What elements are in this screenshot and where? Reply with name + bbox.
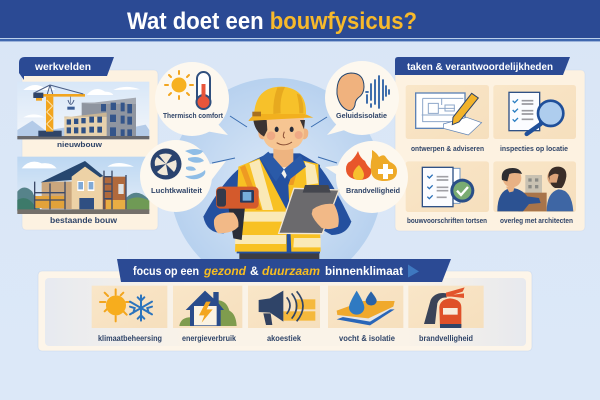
icon: ear — [337, 73, 364, 110]
central halo circle — [170, 78, 382, 290]
label: geluidsisolatie: Geluidsisolatie — [336, 113, 387, 120]
arm right — [310, 165, 351, 235]
title: Wat doet een bouwfysicus? — [127, 8, 417, 35]
focus ribbon: duurzaam — [262, 264, 320, 278]
taken ribbon — [395, 57, 570, 75]
focus ribbon: gezond — [203, 264, 247, 278]
icon: sound wave — [366, 76, 389, 108]
icon: thermometer — [196, 72, 210, 109]
label: bestaande bouw: bestaande bouw — [50, 215, 117, 225]
panel: taken en verantwoordelijkheden — [395, 57, 585, 231]
eyes — [275, 127, 294, 132]
bubble: brandveiligheid — [325, 141, 408, 213]
label: klimaatbeheersing: klimaatbeheersing — [98, 334, 162, 343]
image: nieuwbouw — [17, 82, 149, 139]
label: vocht en isolatie: vocht & isolatie — [339, 334, 396, 343]
taken card — [395, 70, 585, 231]
clipboard — [279, 185, 339, 234]
icon: flame — [346, 151, 371, 180]
cheeks — [267, 131, 303, 140]
focus ribbon — [117, 259, 451, 282]
bubble: geluidsisolatie — [325, 61, 399, 135]
label: inspecties: inspecties op locatie — [500, 144, 568, 153]
label: bouwvoorschriften: bouwvoorschriften tortsen — [407, 216, 487, 225]
cell: ontwerpen — [406, 85, 489, 139]
hair — [253, 120, 305, 137]
cell: bouwvoorschriften — [406, 161, 489, 212]
thermal camera — [216, 187, 259, 240]
face — [263, 117, 304, 150]
bubble: luchtkwaliteit — [140, 140, 226, 212]
label: brandveiligheid: brandvelligheid — [419, 334, 473, 343]
werkvelden card — [22, 70, 158, 230]
smile — [277, 132, 292, 145]
tile: energieverbruik — [173, 286, 242, 328]
vest stripes — [235, 159, 321, 247]
vest orange edges — [240, 161, 300, 210]
hand right — [312, 204, 339, 229]
tile: akoestiek — [248, 286, 320, 328]
label: thermisch comfort: Thermisch comfort — [163, 113, 224, 120]
bubble: thermisch comfort — [155, 62, 229, 136]
icon: flame with plus — [371, 150, 397, 181]
arm left — [203, 167, 247, 233]
focus ribbon: & — [250, 264, 259, 278]
focus ribbon: binnenklimaat — [325, 264, 403, 278]
focus inner area — [45, 278, 526, 346]
ears — [258, 128, 308, 139]
label: nieuwbouw: nieuwbouw — [57, 140, 102, 149]
hard hat — [248, 87, 313, 121]
undershirt — [277, 167, 291, 179]
cell: inspecties — [493, 85, 576, 139]
icon: air waves — [185, 149, 205, 179]
connector lines — [212, 116, 337, 163]
cell: overleg — [493, 161, 576, 212]
panel: focus — [38, 259, 532, 351]
worker figure — [203, 87, 351, 263]
label: brandveiligheid: Brandvelligheid — [346, 188, 400, 195]
label: energieverbruik: energieverbruik — [182, 334, 236, 343]
shirt — [237, 153, 320, 253]
label: overleg: overleg met architecten — [500, 216, 573, 225]
icon: fan — [150, 148, 182, 180]
vest — [235, 158, 321, 252]
header banner — [0, 0, 600, 41]
focus ribbon: focus op een — [133, 264, 199, 278]
focus card — [38, 271, 532, 351]
hand left — [214, 213, 238, 233]
label: ontwerpen en adviseren: ontwerpen & adviseren — [411, 144, 484, 153]
panel: werkvelden — [17, 57, 158, 230]
werkvelden ribbon — [19, 57, 114, 80]
label: akoestiek: akoestiek — [267, 334, 302, 343]
collar — [260, 152, 306, 182]
taken ribbon: taken & verantwoordelijkheden — [407, 61, 553, 73]
image: bestaande bouw — [17, 157, 149, 214]
tile: vocht en isolatie — [328, 286, 403, 328]
label: luchtkwaliteit: Luchtkwaliteit — [151, 188, 203, 195]
tile: klimaatbeheersing — [92, 286, 167, 328]
tile: brandveiligheid — [408, 286, 484, 328]
trousers — [239, 250, 319, 263]
werkvelden ribbon: werkvelden — [34, 62, 91, 73]
icon: sun — [165, 71, 193, 99]
neck — [273, 145, 293, 170]
